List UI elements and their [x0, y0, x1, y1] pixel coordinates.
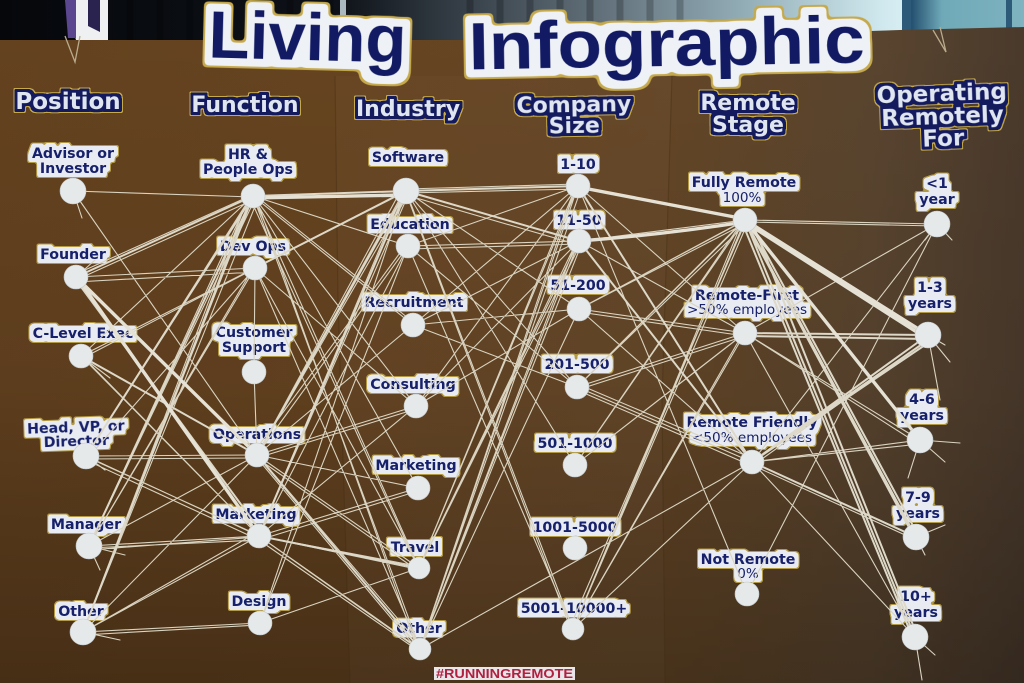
labels: Company Size column: 11-50 [556, 213, 602, 229]
heading: Company Size: Company [516, 92, 631, 119]
labels: Operating Remotely For column: years [894, 605, 938, 621]
labels: Operating Remotely For column: years [908, 296, 952, 312]
labels: Remote Stage column: >50% employees [687, 302, 807, 318]
labels: Operating Remotely For column: years [900, 408, 944, 424]
title: Infographic: Infographic [468, 3, 865, 84]
labels: Position column [27, 146, 133, 620]
labels: Operating Remotely For column [894, 176, 955, 621]
labels: Company Size column: 51-200 [550, 278, 606, 294]
labels: Remote Stage column: 0% [737, 566, 759, 582]
labels: Operating Remotely For column: <1 [926, 176, 948, 192]
heading: Function: Function [191, 93, 299, 118]
labels: Function column: Design [232, 594, 286, 610]
heading: Remote Stage: Remote [700, 91, 796, 116]
heading: Operating Remotely For: For [922, 125, 965, 153]
medium strings [76, 186, 928, 649]
labels: Function column: Support [222, 340, 286, 356]
pins: Remote Stage column [733, 208, 764, 606]
labels: Operating Remotely For column: years [896, 506, 940, 522]
labels: Position column: Manager [51, 517, 121, 533]
heading: Industry: Industry [356, 97, 460, 122]
labels: Remote Stage column: <50% employees [692, 430, 812, 446]
labels: Position column: Other [58, 604, 104, 620]
labels: Function column: Marketing [215, 507, 297, 523]
thin strings [73, 184, 960, 680]
hashtag strip: #RUNNINGREMOTE [436, 666, 573, 681]
pins: Function column [241, 184, 272, 635]
heading: Position: Position [15, 89, 121, 115]
heading: Remote Stage: Stage [712, 113, 784, 138]
labels: Function column: Customer [216, 325, 292, 341]
labels: Position column: Investor [40, 161, 106, 177]
labels: Industry column: Software [372, 150, 444, 166]
labels: Company Size column: 1-10 [560, 157, 596, 173]
pins: Operating Remotely For column [902, 211, 950, 650]
labels: Operating Remotely For column: 7-9 [905, 490, 931, 506]
labels: Function column: Operations [213, 427, 301, 443]
labels: Operating Remotely For column: 10+ [900, 589, 932, 605]
labels: Remote Stage column [686, 175, 818, 582]
background: room with curtains and windows [0, 0, 1024, 60]
labels: Industry column: Other [396, 621, 442, 637]
labels: Position column: Director [43, 433, 109, 451]
labels: Position column: C-Level Exec [33, 326, 133, 342]
labels: Operating Remotely For column: 1-3 [917, 280, 943, 296]
pins: Position column [60, 178, 102, 645]
labels: Remote Stage column: 100% [723, 190, 762, 206]
labels: Function column: HR & [228, 147, 268, 163]
labels: Function column: Dev Ops [220, 239, 286, 255]
labels: Position column: Advisor or [32, 146, 114, 162]
labels: Company Size column: 5001-10000+ [521, 601, 627, 617]
labels: Remote Stage column: Fully Remote [692, 175, 796, 191]
labels: Industry column: Consulting [370, 377, 456, 393]
labels: Remote Stage column: Not Remote [701, 552, 795, 568]
labels: Function column [203, 147, 301, 610]
labels: Position column: Founder [40, 247, 106, 263]
labels: Function column: People Ops [203, 162, 293, 178]
labels: Company Size column [521, 157, 627, 617]
hanging bracket, top left [65, 0, 108, 40]
labels: Position column: Head, VP, or [27, 418, 125, 438]
labels: Industry column: Marketing [375, 458, 457, 474]
labels: Industry column [364, 150, 464, 637]
pins: Industry column [393, 178, 431, 660]
labels: Industry column: Education [370, 217, 450, 233]
labels: Company Size column: 501-1000 [538, 436, 613, 452]
labels: Remote Stage column: Remote Friendly [686, 415, 818, 431]
heading: Operating Remotely For: Remotely [881, 102, 1004, 132]
labels: Remote Stage column: Remote-First [695, 288, 799, 304]
labels: Company Size column: 1001-5000 [533, 520, 618, 536]
labels: Company Size column: 201-500 [544, 357, 610, 373]
labels: Industry column: Travel [391, 540, 439, 556]
labels: Industry column: Recruitment [364, 295, 464, 311]
heading: Company Size: Size [548, 114, 600, 139]
labels: Operating Remotely For column: year [919, 192, 955, 208]
labels: Operating Remotely For column: 4-6 [909, 392, 935, 408]
pins: Company Size column [562, 174, 591, 640]
thick bundles [76, 187, 928, 536]
string network [73, 184, 960, 680]
heading: Operating Remotely For: Operating [876, 79, 1007, 109]
